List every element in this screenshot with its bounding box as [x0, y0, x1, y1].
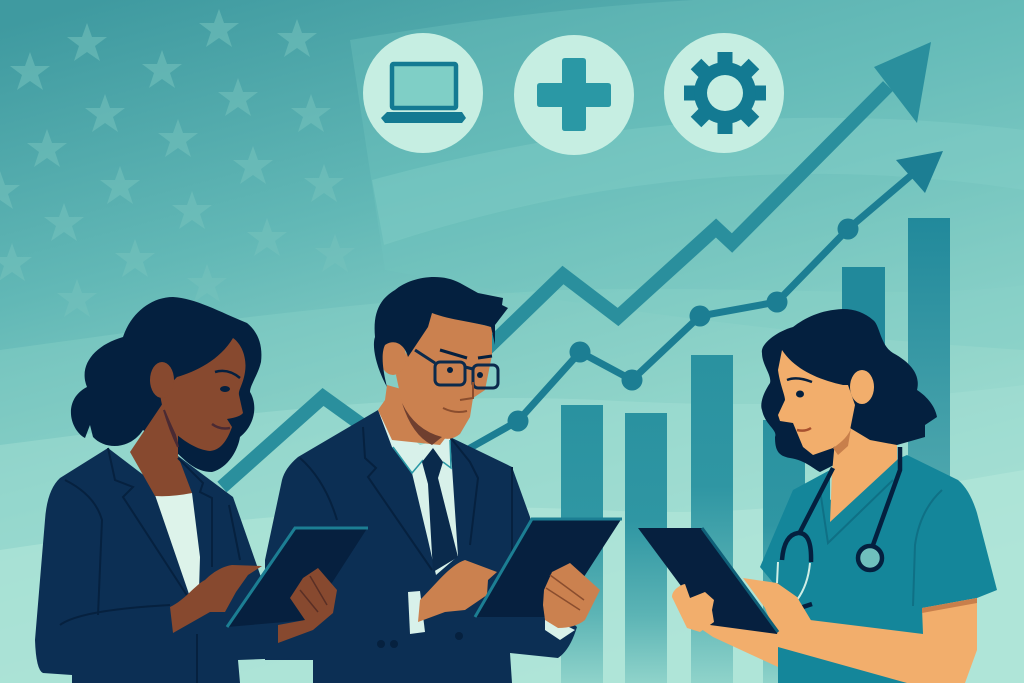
small growth arrow with data points [440, 151, 943, 465]
person: woman in suit [35, 297, 368, 683]
blouse [155, 493, 200, 597]
hair [71, 297, 261, 472]
hand holding tablet [278, 568, 337, 643]
icon: laptop [363, 33, 483, 153]
jacket [265, 410, 577, 683]
arm [778, 598, 977, 683]
right hand [743, 578, 812, 645]
hair [761, 309, 937, 472]
ear [150, 362, 174, 398]
sleeve shadow [922, 598, 977, 613]
fingers on tablet [672, 584, 714, 632]
ear [850, 370, 874, 404]
face features [215, 371, 240, 378]
sleeve seam [913, 490, 942, 606]
tablet [227, 527, 368, 627]
left forearm [688, 620, 778, 667]
person: man in suit with glasses [265, 277, 622, 683]
buttons [377, 640, 385, 648]
collar line [393, 440, 451, 473]
neck [130, 400, 192, 496]
scrubs [760, 455, 997, 683]
large growth arrow [222, 42, 931, 487]
jacket lapel lines [60, 448, 240, 683]
face features [787, 378, 812, 382]
jaw shadow [833, 428, 851, 455]
hand holding tablet [543, 563, 600, 628]
neck [830, 428, 897, 522]
v-neck trim [820, 480, 893, 543]
tablet [638, 528, 778, 634]
shirt cuff [408, 591, 425, 634]
jacket [35, 448, 290, 683]
glasses [415, 350, 498, 388]
face [160, 338, 246, 451]
face [778, 350, 855, 455]
jaw shadow [402, 403, 442, 445]
neck [378, 385, 450, 445]
lapel lines [300, 427, 512, 570]
tablet [475, 518, 622, 617]
person: nurse with stethoscope [638, 309, 997, 683]
tie [422, 448, 458, 572]
hand pointing [418, 560, 497, 622]
face [396, 313, 492, 439]
pointing hand [170, 565, 262, 633]
shirt [378, 410, 458, 575]
jaw shadow [164, 410, 178, 447]
stethoscope [777, 447, 900, 608]
brows and eyes [440, 350, 492, 358]
hair [374, 277, 508, 387]
icon: gear [664, 33, 784, 153]
icon: medical cross [514, 35, 634, 155]
flag stars [0, 9, 355, 317]
nose and mouth [443, 382, 473, 412]
ear [380, 339, 406, 375]
bar chart [561, 218, 950, 683]
